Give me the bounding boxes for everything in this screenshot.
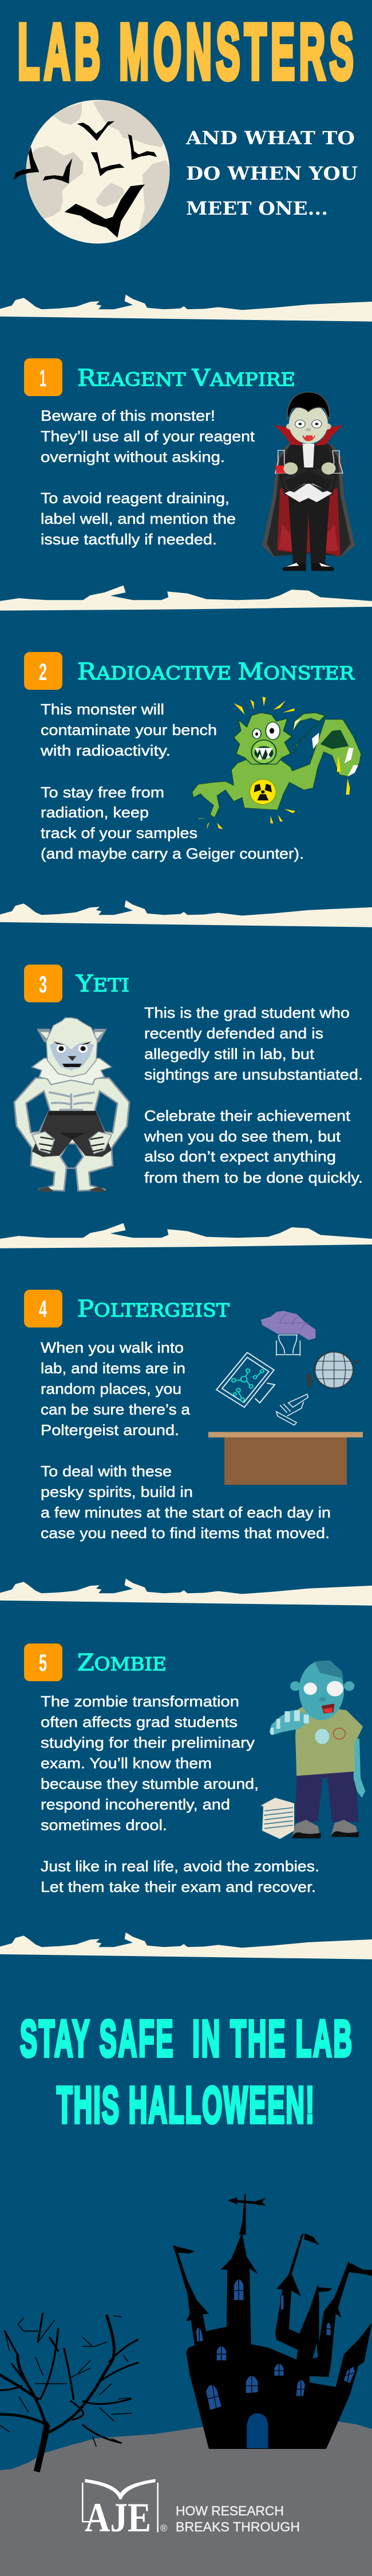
body text: To stay free from [41,784,164,801]
closing message: THIS HALLOWEEN! [57,2077,314,2134]
body text: This monster will [41,701,164,718]
body text: overnight without asking. [41,448,225,465]
exam papers [261,1798,294,1839]
body text: contaminate your bench [41,721,217,738]
icon: floating lab items [216,1311,359,1425]
icon: open book [82,2479,158,2532]
body text: exam. You’ll know them [41,1755,212,1772]
globe [306,1352,359,1388]
ground hill [0,2421,372,2576]
number badge 4: 4 [39,1295,47,1322]
heading: REAGENT VAMPIRE [77,365,295,392]
moon disc [26,100,169,244]
body text: sometimes drool. [41,1816,167,1834]
closing message [20,2010,352,2134]
tagline: HOW RESEARCH [176,2503,284,2518]
body text: issue tactfully if needed. [41,531,217,548]
body text [41,407,255,548]
logo: AJE [82,2479,300,2541]
subtitle [185,127,358,219]
heading: YETI [76,971,129,997]
body text: radiation, keep [41,804,149,821]
heading: ZOMBIE [77,1650,167,1676]
flags [173,2233,372,2292]
castle silhouette [173,2233,372,2449]
moon with bats [14,98,173,244]
body text: Poltergeist around. [41,1421,179,1439]
number badge 1: 1 [39,365,46,392]
body text: case you need to find items that moved. [41,1524,330,1542]
body text: Let them take their exam and recover. [41,1878,316,1895]
body text [41,1339,331,1542]
body text [144,1004,363,1186]
icon: haunted castle [173,2194,372,2449]
door [247,2413,268,2448]
wordmark: AJE [85,2495,151,2541]
body text: allegedly still in lab, but [144,1045,315,1062]
body text: random places, you [41,1380,181,1397]
body text: lab, and items are in [41,1360,185,1377]
panel: zombie [24,1643,365,1895]
body text: with radioactivity. [40,742,171,759]
panel: radioactive monster [24,652,361,862]
body text: pesky spirits, build in [41,1483,193,1500]
closing message: STAY SAFE IN THE LAB [20,2010,352,2068]
body text: can be sure there’s a [41,1401,191,1418]
body text: label well, and mention the [41,510,236,527]
microscope [276,1394,308,1425]
body text: often affects grad students [41,1713,238,1730]
icon: lab bench [208,1432,363,1485]
tagline [176,2503,300,2534]
body text: Just like in real life, avoid the zombies. [41,1858,319,1875]
torn paper divider 3 [0,900,372,927]
body text [40,701,304,862]
body text [41,1693,319,1895]
title: LAB MONSTERS [18,9,354,96]
number badge 3: 3 [39,971,47,998]
icon: bare tree [0,2314,137,2472]
torn paper divider 4 [0,1223,372,1249]
heading: RADIOACTIVE MONSTER [77,659,355,685]
body text: track of your samples [41,824,197,841]
number badge 4 [24,1290,62,1327]
tablet with molecule [216,1353,275,1407]
icon: yeti [14,1018,129,1192]
body text: a few minutes at the start of each day in [41,1504,331,1521]
body text: This is the grad student who [144,1004,350,1021]
moon craters [21,98,173,230]
panel: poltergeist [24,1290,363,1542]
torn paper divider 2 [0,586,372,611]
body text: They’ll use all of your reagent [41,428,255,445]
beaker [276,1335,300,1356]
body text: To deal with these [41,1463,172,1480]
bats [14,121,157,238]
number badge 5 [24,1643,62,1681]
torn paper divider 1 [0,295,372,322]
body text: recently defended and is [144,1025,323,1042]
icon: vampire [262,392,355,571]
body text: because they stumble around, [41,1775,259,1792]
panel: reagent vampire [24,358,355,571]
number badge 5: 5 [39,1649,47,1676]
torn paper divider 6 [0,1933,372,1959]
number badge 2 [24,652,62,690]
windows [196,2277,355,2411]
body text: When you walk into [41,1339,184,1356]
number badge 3 [24,965,62,1002]
number badge 2: 2 [39,658,47,685]
registered mark: ® [160,2523,168,2534]
ghost hand [261,1311,315,1340]
panel: yeti [14,965,363,1192]
subtitle: MEET ONE... [186,197,328,219]
body text: also don’t expect anything [144,1148,336,1165]
body text: respond incoherently, and [41,1796,230,1813]
body text: The zombie transformation [41,1693,239,1710]
body text: sightings are unsubstantiated. [144,1066,363,1083]
icon: radioactive monster [192,697,361,830]
body text: Celebrate their achievement [144,1107,351,1124]
heading: POLTERGEIST [77,1296,230,1322]
icon: zombie with exam papers [261,1660,365,1839]
tagline: BREAKS THROUGH [176,2519,300,2534]
subtitle: AND WHAT TO [185,127,355,149]
body text: (and maybe carry a Geiger counter). [41,845,304,862]
number badge 1 [24,358,62,396]
body text: from them to be done quickly. [144,1169,363,1186]
torn paper divider 5 [0,1579,372,1606]
weather vane [228,2194,266,2235]
body text: Beware of this monster! [41,407,215,424]
body text: studying for their preliminary [41,1734,255,1751]
body text: when you do see them, but [144,1128,341,1145]
body text: To avoid reagent draining, [41,489,229,507]
subtitle: DO WHEN YOU [186,163,358,184]
